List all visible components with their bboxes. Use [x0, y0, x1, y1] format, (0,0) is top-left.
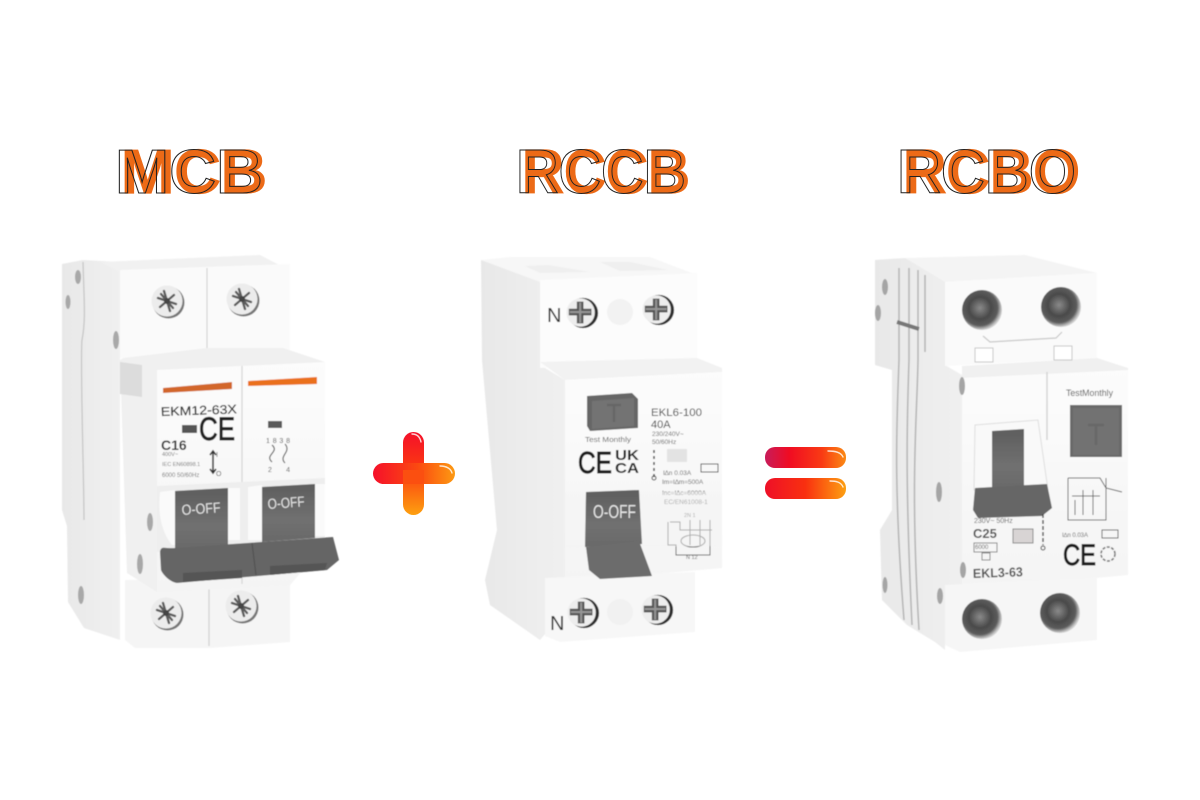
icon: MCB terminal screws	[150, 284, 260, 630]
MCB label text: 6000 50/60Hz	[162, 473, 199, 479]
device: MCB breaker	[62, 255, 339, 648]
device: RCBO breaker	[875, 255, 1128, 652]
RCCB label text: CE	[578, 445, 612, 480]
RCCB label text: I∆n 0.03A	[663, 470, 692, 477]
RCCB toggle handle: O-OFF	[593, 502, 636, 522]
RCBO label text: EKL3-63	[973, 564, 1023, 581]
MCB label text	[161, 402, 290, 479]
MCB label text: EKM12-63X	[161, 402, 238, 419]
heading: RCBO: RCBO	[897, 138, 1076, 207]
device: RCCB breaker	[481, 257, 722, 642]
heading: RCCB: RCCB	[522, 138, 690, 207]
icon: certification gear	[1101, 547, 1115, 561]
RCBO wiring diagram	[1068, 478, 1122, 520]
MCB toggle handles	[160, 484, 339, 583]
RCCB label text: EC/EN61008-1	[664, 499, 708, 506]
heading: RCBO: RCBO	[903, 138, 1080, 207]
RCCB label text: 2N 1	[684, 513, 696, 519]
RCCB label text: 40A	[651, 419, 671, 431]
MCB label text: 1 8 3 8	[266, 438, 290, 445]
MCB label text: 400V~	[162, 452, 178, 458]
RCCB label text: CA	[615, 460, 639, 477]
heading: RCCB: RCCB	[516, 138, 686, 207]
RCBO label text: 230V~ 50Hz	[974, 518, 1013, 525]
icon: plus sign	[373, 432, 455, 515]
MCB label text: C16	[161, 437, 187, 453]
RCCB label text: UK	[615, 447, 639, 464]
RCBO toggle handle	[973, 429, 1052, 518]
RCCB label text: Im=I∆m=500A	[662, 479, 704, 486]
heading: MCB: MCB	[121, 138, 267, 207]
RCCB wiring diagram	[668, 520, 712, 555]
RCBO test button	[1070, 405, 1122, 457]
indicator stripes	[163, 377, 317, 393]
MCB label text: 2 4	[268, 467, 290, 474]
RCBO terminal tabs	[975, 346, 1072, 362]
MCB label text: IEC EN60898.1	[162, 462, 200, 468]
RCCB N marks: N	[550, 613, 564, 635]
RCCB label text: 50/60Hz	[652, 439, 676, 446]
ribbed side	[897, 268, 925, 630]
icon: RCCB terminal screws	[566, 295, 674, 628]
icon: RCBO terminal holes	[962, 287, 1081, 639]
RCCB label text: Test Monthly	[585, 435, 631, 444]
MCB toggle handles: O-OFF	[267, 494, 305, 513]
icon: mounting holes	[66, 270, 153, 604]
RCBO handle guard	[974, 420, 1048, 490]
heading: MCB: MCB	[115, 138, 263, 207]
RCCB N marks: N	[547, 305, 561, 327]
RCCB test button	[587, 393, 638, 431]
RCBO label text	[973, 388, 1113, 581]
MCB label text: CE	[199, 411, 235, 447]
RCBO label text: CE	[1063, 539, 1096, 572]
RCCB label text: EKL6-100	[651, 407, 702, 419]
MCB handle guards	[157, 478, 325, 552]
RCBO label text: C25	[973, 526, 997, 541]
RCBO label text: 6000	[975, 545, 989, 551]
RCBO label text: TestMonthly	[1066, 388, 1113, 398]
MCB label text: I	[216, 452, 218, 459]
RCCB toggle handle	[565, 490, 722, 579]
RCCB label text: 230/240V~	[652, 431, 684, 438]
RCCB label text: Inc=I∆c=6000A	[662, 490, 707, 497]
icon: equals sign	[765, 447, 846, 499]
RCCB label text	[578, 407, 708, 561]
RCCB N marks	[547, 305, 564, 635]
MCB toggle handles: O-OFF	[181, 500, 221, 519]
RCCB label text: N 12	[686, 555, 698, 561]
MCB label text: O	[216, 471, 222, 478]
RCBO label text: I∆n 0.03A	[1062, 532, 1088, 539]
